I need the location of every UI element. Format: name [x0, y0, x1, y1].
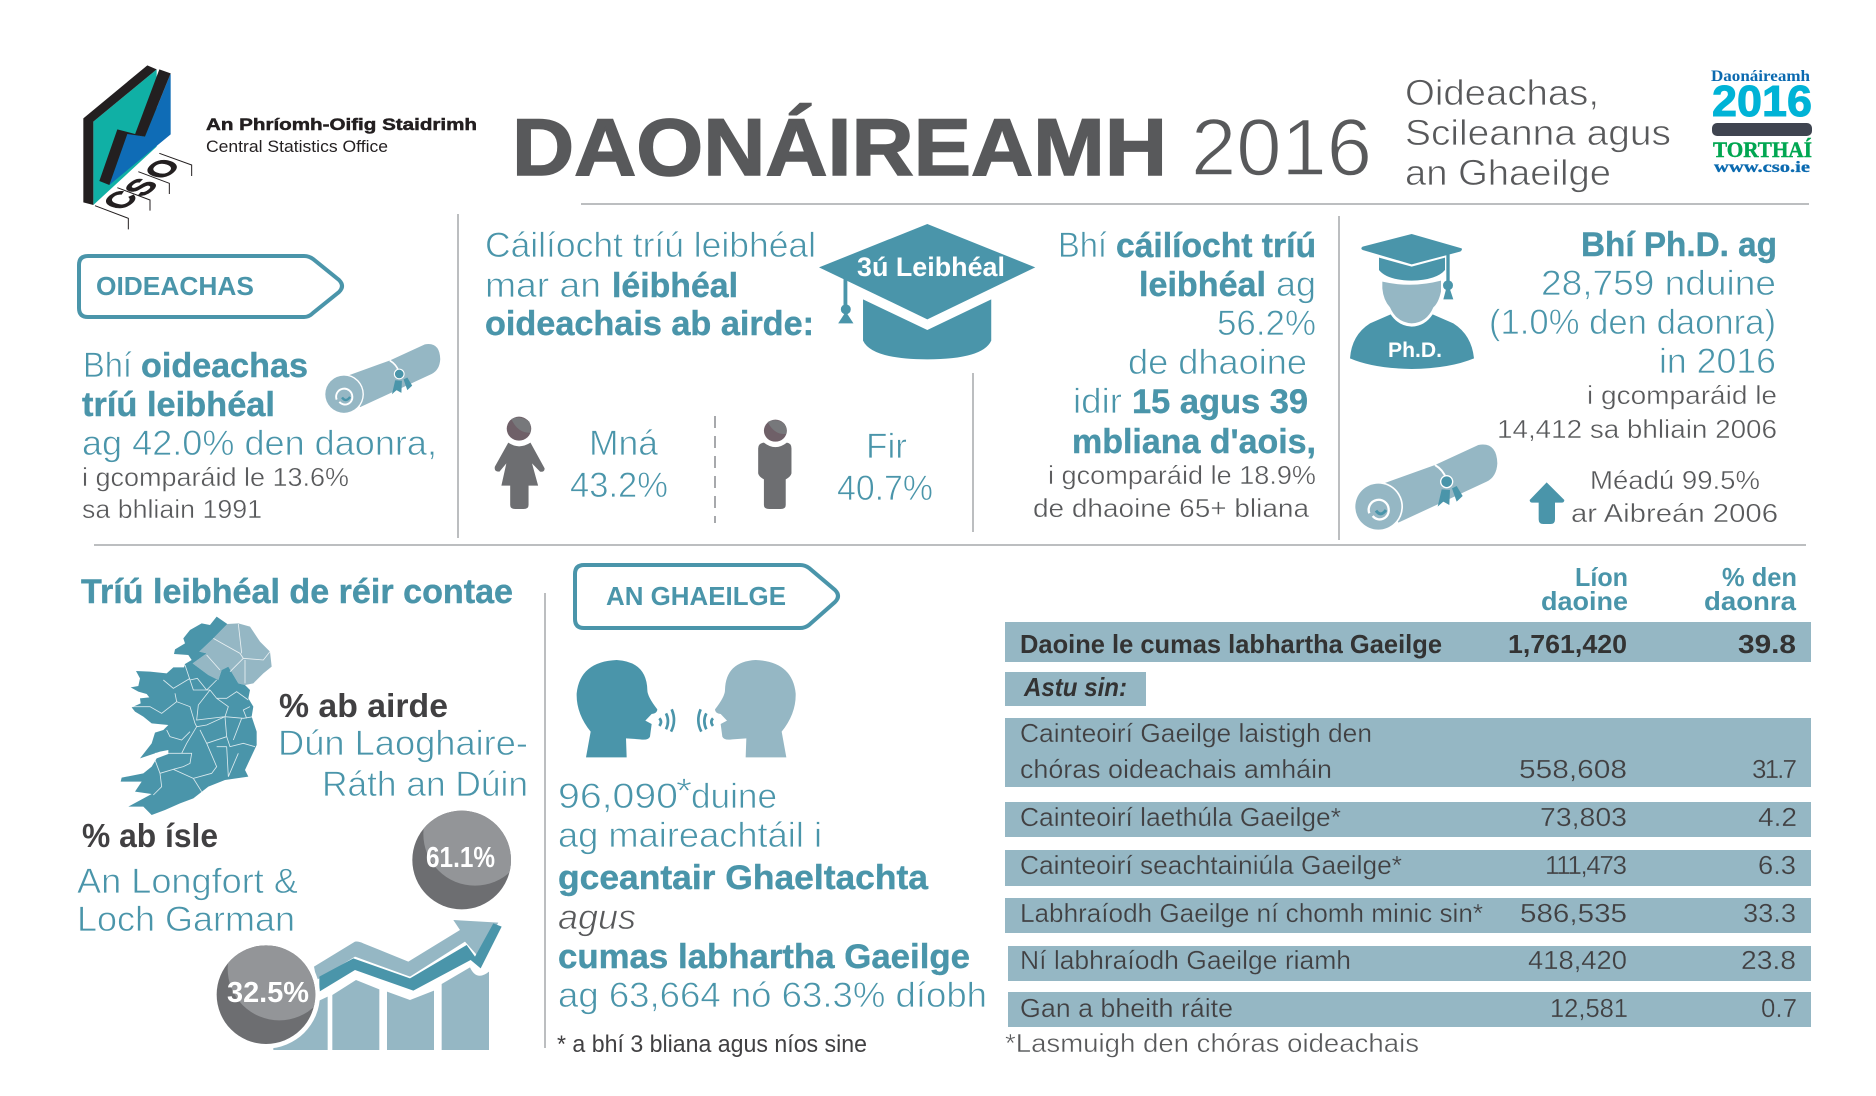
text: lowest — [77, 817, 298, 939]
logo: CSO mark: C — [95, 186, 146, 214]
subtitle: Scileanna agus — [1405, 112, 1671, 153]
table row: daily — [1005, 802, 1811, 837]
table row: daily: Cainteoirí laethúla Gaeilge* — [1020, 802, 1341, 832]
stat: men — [837, 427, 933, 508]
text: highest — [278, 687, 528, 804]
text: tertiary education: tríú leibhéal — [82, 386, 275, 424]
census logo: www.cso.ie — [1714, 159, 1810, 176]
table row: never: Ní labhraíodh Gaeilge riamh — [1020, 945, 1351, 975]
text: Ph.D. holders — [1489, 226, 1777, 444]
text: third level as highest: mar an — [485, 266, 601, 305]
icon: man — [758, 420, 791, 509]
stat: women — [570, 424, 668, 505]
chart: rising bars and arrow — [273, 920, 502, 1050]
text: Gaeltacht — [558, 772, 987, 1015]
table row: daily: 73,803 — [1540, 802, 1627, 832]
text: age 15 to 39: idir — [1073, 382, 1122, 421]
logo: CSO mark — [83, 65, 192, 229]
text: Gaeltacht: duine — [691, 777, 777, 816]
text: highest: Dún Laoghaire- — [278, 724, 528, 763]
tag: AN GHAEILGE: AN GHAEILGE — [606, 581, 786, 611]
table row: weekly — [1005, 850, 1811, 886]
text: tertiary education: i gcomparáid le 13.6% — [82, 462, 349, 492]
tag: OIDEACHAS — [79, 256, 342, 317]
table row: less often — [1005, 898, 1811, 933]
table row: total — [1005, 622, 1811, 662]
heading: by county: Tríú leibhéal de réir contae — [81, 573, 513, 611]
logo text: Central Statistics Office — [206, 137, 388, 156]
text: Ph.D. holders: Bhí Ph.D. ag — [1581, 226, 1777, 264]
text: Gaeltacht: * — [676, 772, 692, 811]
table row: never: 23.8 — [1741, 945, 1796, 975]
map: Ireland — [121, 617, 272, 815]
table row: daily: 4.2 — [1758, 802, 1797, 832]
text: increase: ar Aibreán 2006 — [1571, 498, 1778, 528]
table row: never: 418,420 — [1528, 945, 1627, 975]
table row: total: Daoine le cumas labhartha Gaeilge — [1020, 629, 1442, 659]
text: lowest: An Longfort & — [77, 862, 298, 901]
stat: men: 40.7% — [837, 469, 933, 508]
text: age 15 to 39: mbliana d'aois, — [1072, 423, 1316, 461]
logo text: An Phríomh-Oifig Staidrimh — [206, 115, 477, 134]
title: 2016 — [1191, 103, 1372, 193]
subtitle: an Ghaeilge — [1405, 152, 1611, 193]
text: age 15 to 39: ag — [1276, 265, 1316, 304]
icon: small scroll — [324, 344, 440, 414]
table row: education only: 31.7 — [1752, 754, 1797, 784]
icon: woman — [495, 417, 545, 509]
badge: 32.5% — [216, 945, 320, 1048]
text: age 15 to 39: leibhéal — [1139, 266, 1266, 304]
table row: less often: 586,535 — [1520, 898, 1627, 928]
footnote: age: * a bhí 3 bliana agus níos sine — [557, 1031, 867, 1058]
text: increase: Méadú 99.5% — [1590, 465, 1760, 495]
icon: mortarboard — [819, 224, 1035, 359]
logo: CSO mark: O — [136, 154, 189, 183]
table row: less often: Labhraíodh Gaeilge ní chomh minic sin* — [1020, 898, 1483, 928]
text: Ph.D. holders: in 2016 — [1659, 342, 1776, 381]
text: Ph.D. holders: 14,412 sa bhliain 2006 — [1497, 414, 1777, 444]
table label: Astu sin — [1005, 672, 1146, 706]
text: highest: Ráth an Dúin — [322, 765, 528, 804]
census logo: TORTHAÍ — [1713, 137, 1812, 162]
text: tertiary education: sa bhliain 1991 — [82, 494, 262, 524]
logo text — [206, 115, 477, 156]
census logo: 2016 — [1712, 77, 1812, 126]
table header: daoine — [1541, 586, 1628, 616]
census logo — [1711, 68, 1812, 176]
text: age 15 to 39: 56.2% — [1217, 304, 1316, 343]
icon: mortarboard: 3ú Leibhéal — [857, 252, 1005, 282]
table row: education only: chóras oideachais amháin — [1020, 754, 1332, 784]
table label: Astu sin: Astu sin: — [1023, 672, 1127, 702]
stat: men: Fir — [866, 427, 907, 466]
text: age 15 to 39: 15 agus 39 — [1132, 383, 1308, 421]
text: lowest: Loch Garman — [77, 900, 295, 939]
text: Gaeltacht: 96,090 — [558, 777, 678, 816]
footnote: outside education: *Lasmuigh den chóras oideachais — [1005, 1028, 1419, 1058]
table row: not stated — [1008, 992, 1811, 1027]
icon: Ph.D. graduate: Ph.D. — [1388, 339, 1442, 362]
table row: weekly: Cainteoirí seachtainiúla Gaeilge* — [1020, 850, 1402, 880]
table row: not stated: Gan a bheith ráite — [1020, 993, 1233, 1023]
text: age 15 to 39 — [1033, 226, 1316, 523]
text: Ph.D. holders: (1.0% den daonra) — [1489, 303, 1776, 342]
text: third level as highest — [485, 226, 816, 343]
table row: total: 39.8 — [1738, 629, 1796, 659]
table row: weekly: 111,473 — [1545, 850, 1627, 880]
badge: 32.5%: 32.5% — [227, 977, 309, 1009]
text: Gaeltacht: cumas labhartha Gaeilge — [558, 938, 970, 976]
table row: weekly: 6.3 — [1758, 850, 1796, 880]
text: age 15 to 39: Bhí — [1058, 226, 1107, 265]
table row: less often: 33.3 — [1743, 898, 1796, 928]
subtitle: Oideachas, — [1405, 72, 1599, 113]
text: highest: % ab airde — [279, 687, 448, 724]
text: third level as highest: léibhéal — [612, 267, 738, 305]
stat: women: Mná — [589, 424, 659, 463]
tag: AN GHAEILGE — [575, 565, 838, 628]
text: tertiary education: ag 42.0% den daonra, — [82, 424, 437, 463]
text: lowest: % ab ísle — [82, 817, 218, 854]
text: age 15 to 39: i gcomparáid le 18.9% — [1048, 460, 1316, 490]
subtitle — [1405, 72, 1671, 193]
text: Gaeltacht: ag 63,664 nó 63.3% díobh — [558, 976, 987, 1015]
icon: large scroll — [1353, 445, 1497, 531]
table header: Líon — [1575, 562, 1628, 592]
text: Gaeltacht: gceantair Ghaeltachta — [558, 859, 929, 897]
table header: daonra — [1704, 586, 1797, 616]
table row: never — [1008, 945, 1811, 981]
text: Ph.D. holders: i gcomparáid le — [1587, 380, 1777, 410]
text: age 15 to 39: cáilíocht tríú — [1116, 227, 1316, 265]
text: Gaeltacht: ag maireachtáil i — [558, 816, 822, 855]
table header: % den — [1722, 562, 1797, 592]
table row: education only: Cainteoirí Gaeilge laistigh den — [1020, 718, 1372, 748]
table row: education only — [1005, 718, 1811, 787]
text: Ph.D. holders: 28,759 nduine — [1541, 264, 1776, 303]
icon: speaking heads — [577, 660, 796, 757]
table header — [1541, 562, 1797, 616]
title: DAONÁIREAMH — [512, 103, 1167, 193]
census logo: Daonáireamh — [1711, 68, 1810, 85]
text: tertiary education — [82, 346, 437, 524]
text: increase — [1571, 465, 1778, 528]
text: Gaeltacht: agus — [558, 898, 636, 937]
text: third level as highest: Cáilíocht tríú leibhéal — [485, 226, 816, 265]
tag: OIDEACHAS: OIDEACHAS — [96, 271, 254, 301]
icon: Ph.D. graduate — [1350, 234, 1474, 369]
text: tertiary education: Bhí — [83, 346, 132, 385]
table row: total: 1,761,420 — [1508, 629, 1627, 659]
badge: 61.1%: 61.1% — [426, 842, 495, 874]
text: age 15 to 39: de dhaoine 65+ bliana — [1033, 493, 1310, 523]
text: tertiary education: oideachas — [141, 347, 308, 385]
badge: 61.1% — [412, 810, 511, 910]
table row: not stated: 12,581 — [1550, 993, 1628, 1023]
text: third level as highest: oideachais ab airde: — [485, 305, 814, 343]
icon: up arrow — [1530, 482, 1564, 524]
table row: not stated: 0.7 — [1761, 993, 1797, 1023]
stat: women: 43.2% — [570, 466, 668, 505]
text: age 15 to 39: de dhaoine — [1128, 343, 1307, 382]
logo: CSO mark: S — [116, 174, 166, 200]
table row: education only: 558,608 — [1519, 754, 1627, 784]
